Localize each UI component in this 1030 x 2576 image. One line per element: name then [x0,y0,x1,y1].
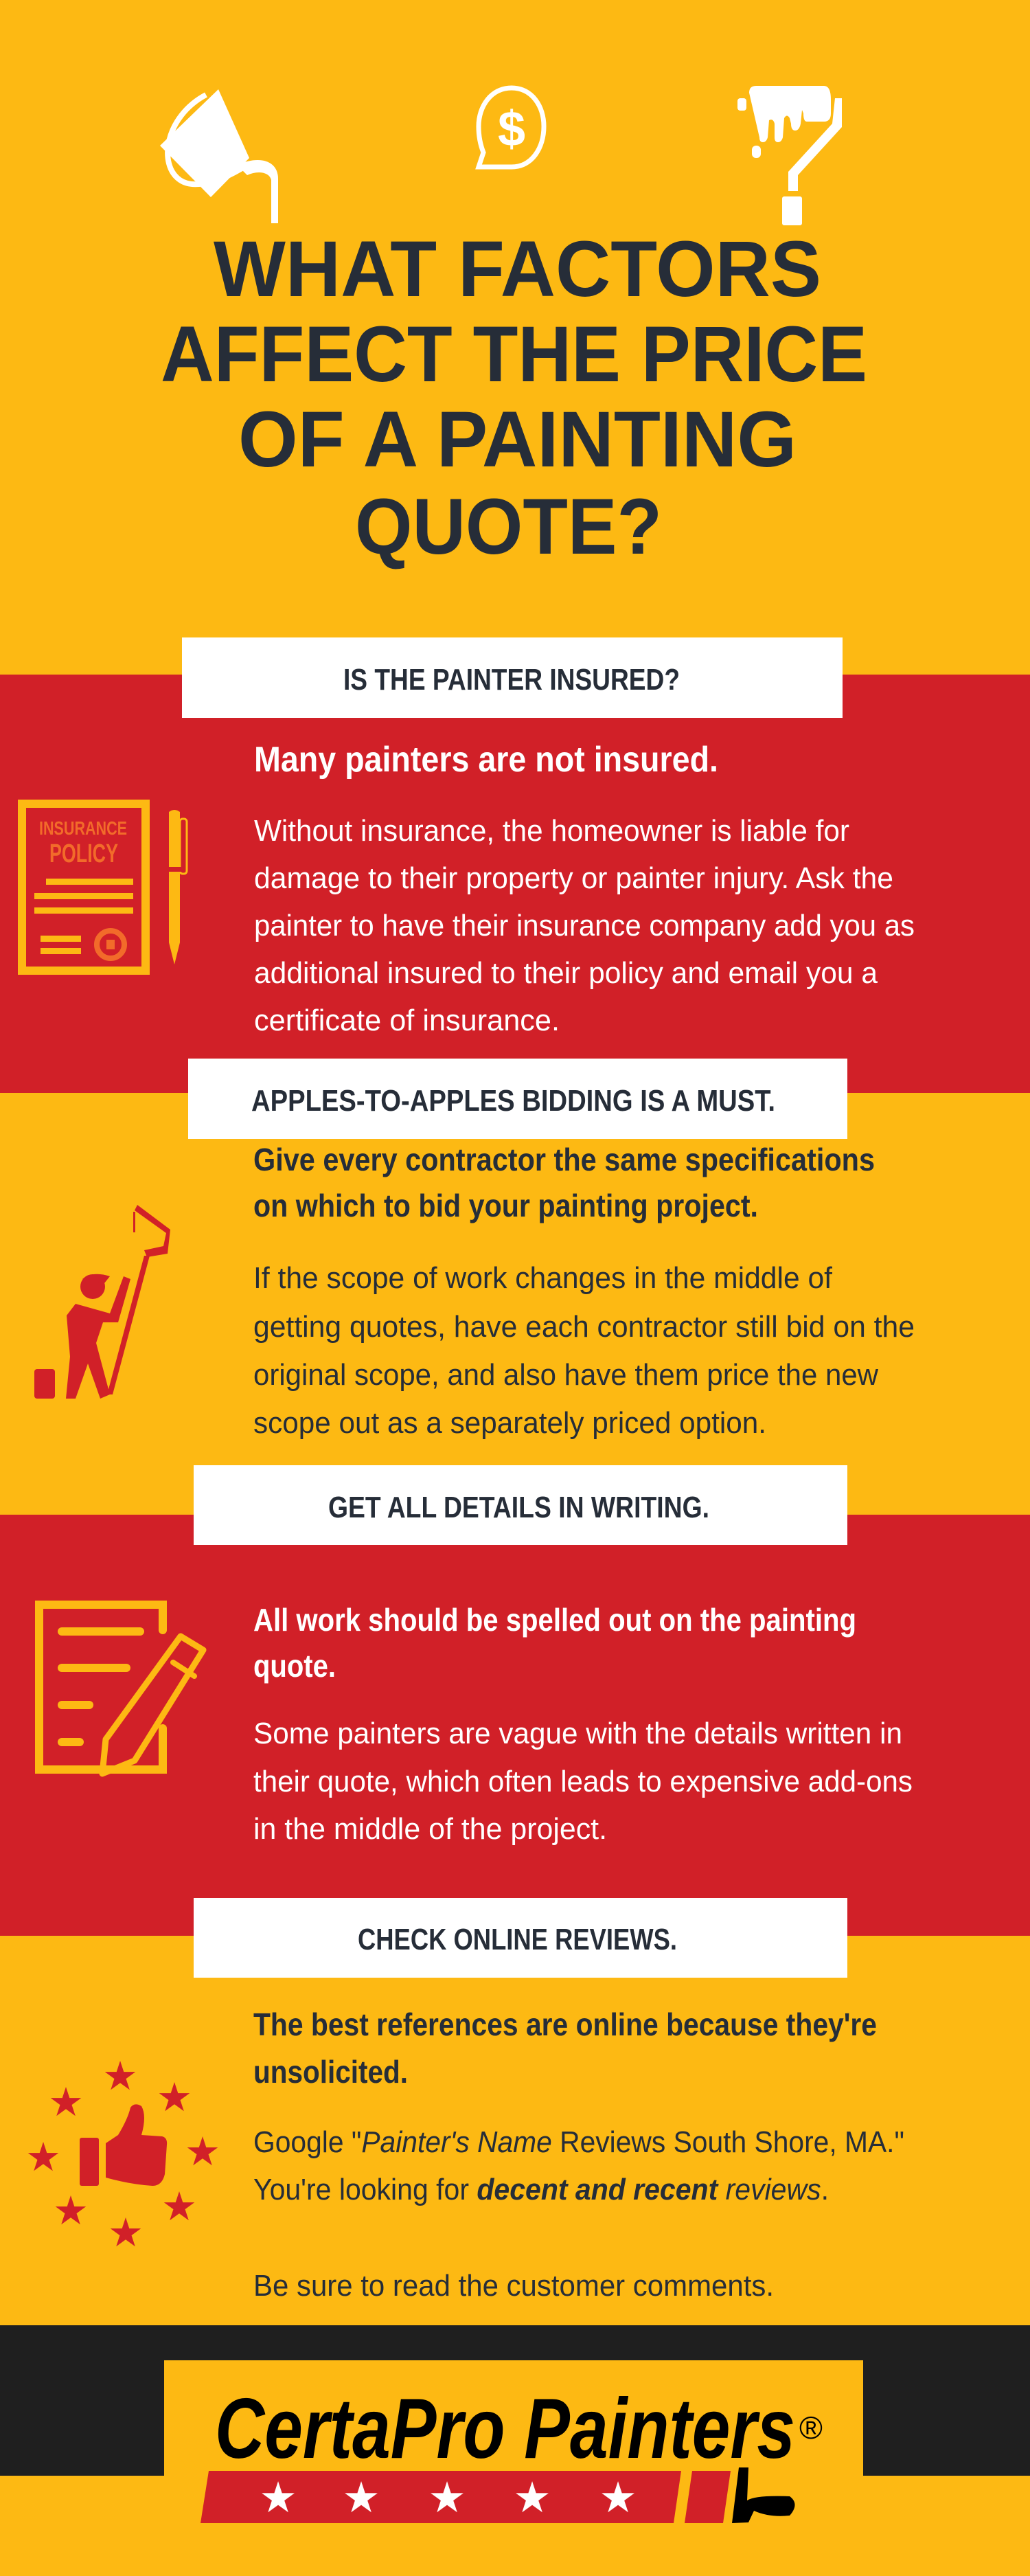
text block: google reviews: You're looking for decent and recent reviews. [253,2173,829,2206]
panel: insured (red band) [0,675,1030,1093]
heading: best references: The best references are online because they're [253,2007,877,2042]
icon: insurance policy: POLICY [49,839,118,868]
text block: scope body: scope out as a separately priced option. [253,1406,766,1440]
title: OF A PAINTING [238,396,797,484]
text block: insurance body: Without insurance, the homeowner is liable for [254,814,849,848]
icon: paint bucket [160,89,278,223]
heading box: check online reviews [194,1898,847,1978]
logo: CertaPro Painters: ★ [428,2474,466,2522]
icon: thumbs up with stars [25,2054,220,2255]
text block: insurance body: additional insured to their policy and email you a [254,956,878,990]
heading: same specifications: on which to bid your painting project. [253,1188,758,1223]
icon: insurance policy: INSURANCE [39,817,127,839]
icon: dollar speech bubble [479,88,544,167]
heading: many painters: Many painters are not insured. [254,740,718,780]
text block: insurance body: damage to their property or painter injury. Ask the [254,861,893,895]
heading: spelled out: All work should be spelled out on the painting [253,1602,856,1638]
footer: logo band [0,2325,1030,2576]
heading box: check online reviews: CHECK ONLINE REVIEWS. [358,1923,677,1956]
panel: details in writing (red band) [0,1515,1030,1936]
title: AFFECT THE PRICE [161,310,867,398]
logo: CertaPro Painters: ® [799,2410,823,2445]
title [161,225,867,571]
text block: insurance body: painter to have their insurance company add you as [254,909,915,942]
title: QUOTE? [355,483,662,571]
text block: google reviews: Be sure to read the customer comments. [253,2269,774,2303]
heading box: is the painter insured: IS THE PAINTER INSURED? [343,663,680,697]
logo: CertaPro Painters: CertaPro Painters [215,2382,795,2476]
text block: scope body: If the scope of work changes in the middle of [253,1261,833,1295]
heading: spelled out: quote. [253,1648,336,1684]
logo: CertaPro Painters: ★ [342,2474,380,2522]
text block: scope body: getting quotes, have each contractor still bid on the [253,1310,915,1344]
text block: google reviews [253,2125,904,2303]
icon: thumbs up with stars: ★ [48,2080,84,2125]
icon: thumbs up with stars: ★ [53,2189,89,2233]
heading box: apples to apples: APPLES-TO-APPLES BIDDING IS A MUST. [251,1084,775,1118]
text block: scope body [253,1261,915,1440]
text block: vague details: their quote, which often leads to expensive add-ons [253,1765,913,1798]
icon: thumbs up with stars: ★ [108,2211,144,2255]
heading box: get all details [194,1465,847,1545]
heading box: get all details: GET ALL DETAILS IN WRITING. [328,1491,709,1524]
text block: insurance body: certificate of insurance. [254,1004,560,1037]
text block: scope body: original scope, and also have them price the new [253,1358,878,1392]
icon: document with pencil [39,1605,203,1774]
icon: paint roller question mark [737,86,842,225]
heading: spelled out [253,1602,856,1684]
text block: vague details: Some painters are vague with the details written in [253,1717,902,1750]
heading: same specifications [253,1142,875,1223]
icon: thumbs up with stars: ★ [185,2129,220,2174]
icon: thumbs up with stars: ★ [102,2054,138,2099]
icon: dollar speech bubble: $ [498,102,525,157]
heading: best references [253,2007,877,2090]
icon: insurance policy [22,804,187,971]
heading: best references: unsolicited. [253,2054,408,2090]
panel: online reviews [25,2007,904,2303]
icon: painter with roller [34,1205,170,1399]
icon: thumbs up with stars: ★ [161,2184,197,2229]
logo: CertaPro Painters: ★ [513,2474,551,2522]
title: WHAT FACTORS [214,225,821,313]
heading box: apples to apples [188,1059,847,1139]
text block: vague details [253,1717,913,1846]
panel: apples to apples [34,1142,915,1440]
logo: CertaPro Painters: ★ [259,2474,297,2522]
logo: CertaPro Painters [201,2382,823,2523]
heading box: is the painter insured [182,637,843,718]
logo: CertaPro Painters: ★ [599,2474,637,2522]
heading: same specifications: Give every contractor the same specifications [253,1142,875,1177]
icon: thumbs up with stars: ★ [25,2135,61,2180]
text block: vague details: in the middle of the project. [253,1812,607,1846]
text block: insurance body [254,814,915,1037]
icon: thumbs up with stars: ★ [157,2075,192,2120]
text block: google reviews: Google "Painter's Name Reviews South Shore, MA." [253,2125,904,2159]
